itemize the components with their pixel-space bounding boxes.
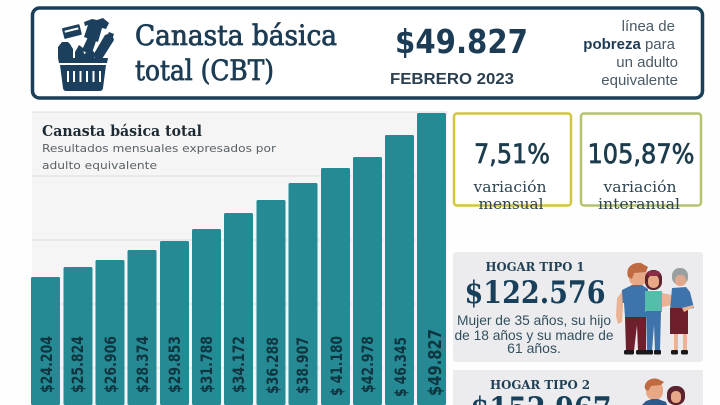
poverty line note [583, 18, 678, 89]
household 1 description: 61 años. [507, 340, 561, 356]
panel: household type 1 [453, 252, 703, 362]
bar values: $42.978 [358, 336, 377, 393]
date: FEBRERO 2023 [390, 71, 514, 88]
household 1 value: $122.576 [464, 275, 606, 311]
title: total (CBT) [135, 54, 274, 87]
chart subtitle: adulto equivalente [42, 159, 157, 172]
household 1 heading: HOGAR TIPO 1 [486, 260, 584, 274]
chart heading: Canasta básica total [42, 122, 202, 140]
annual label [598, 178, 680, 213]
bar values: $36.288 [263, 337, 282, 394]
title: Canasta básica [135, 19, 337, 52]
panel: bar chart [31, 112, 447, 405]
annual label: variación [602, 178, 677, 196]
household 1 description [454, 312, 614, 356]
bar values: $ 46.345 [391, 337, 410, 397]
monthly value: 7,51% [474, 139, 550, 170]
bar values: $31.788 [197, 336, 216, 393]
poverty line note: equivalente [601, 72, 678, 89]
annual label: interanual [598, 195, 680, 213]
woman [645, 270, 662, 290]
icon: family, cropped [642, 379, 685, 405]
panel: annual variation [581, 114, 701, 213]
man [629, 266, 647, 286]
bar values: $26.906 [101, 336, 120, 393]
bar values: $28.374 [133, 336, 152, 393]
bar values: $25.824 [68, 336, 87, 393]
household 2 heading: HOGAR TIPO 2 [490, 378, 590, 392]
bar values: $34.172 [229, 336, 248, 393]
chart subtitle [42, 142, 277, 172]
monthly label: variación [472, 178, 547, 196]
monthly label [472, 178, 547, 213]
chart subtitle: Resultados mensuales expresados por [42, 142, 277, 155]
monthly label: mensual [478, 195, 544, 213]
household 1 description: de 18 años y su madre de [454, 327, 614, 343]
bar values: $29.853 [165, 336, 184, 393]
poverty line note: pobreza para [583, 36, 676, 53]
icon: family of three [616, 263, 694, 354]
poverty line note: un adulto [616, 54, 678, 71]
bar values: $ 41.180 [327, 336, 346, 396]
panel: household type 2 [453, 370, 703, 405]
icon: shopping basket [58, 18, 114, 91]
panel: monthly variation [454, 114, 571, 213]
main value: $49.827 [395, 22, 528, 61]
bar values: $24.204 [37, 336, 56, 393]
panel: header [32, 8, 702, 98]
bar values: $49.827 [425, 329, 446, 396]
poverty line note: línea de [622, 18, 675, 35]
grandmother [662, 293, 672, 307]
annual value: 105,87% [588, 139, 694, 170]
bar values: $38.907 [293, 337, 312, 394]
bars [31, 113, 446, 405]
household 1 description: Mujer de 35 años, su hijo [457, 312, 611, 328]
bar values [37, 329, 446, 397]
title [135, 19, 337, 87]
